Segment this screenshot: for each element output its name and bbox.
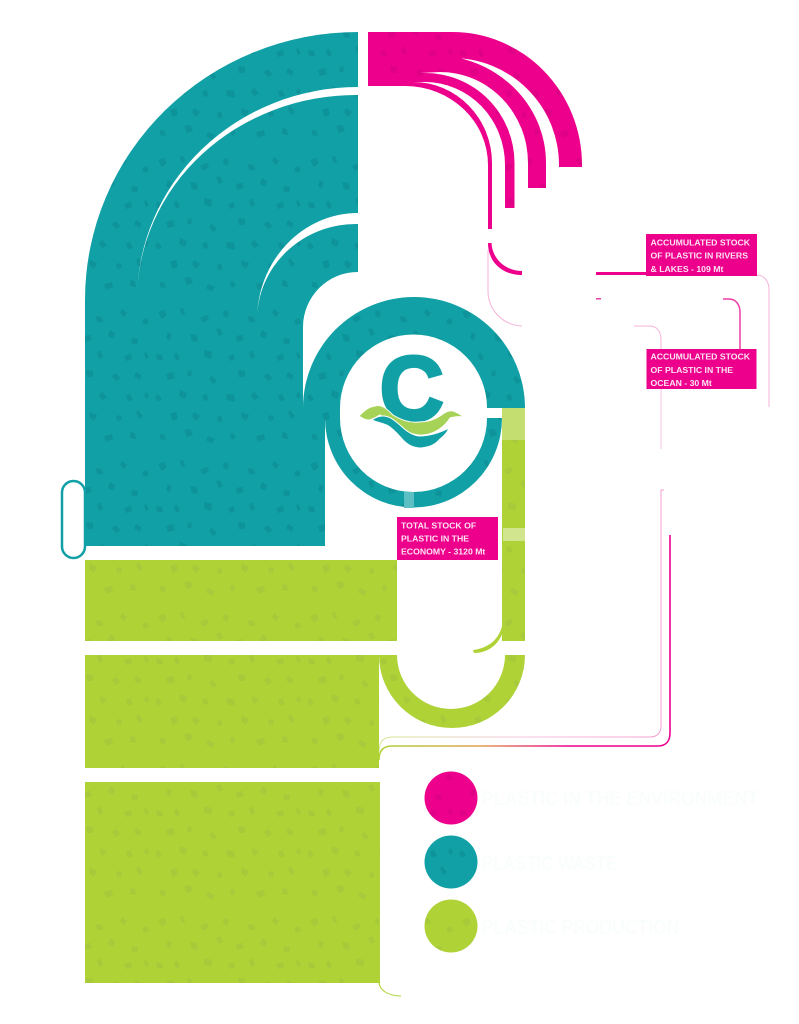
callout box: [397, 517, 498, 560]
callout: rivers and lakes stock: [646, 234, 757, 276]
pink connector to ocean box: [723, 299, 740, 349]
green vertical bar: [502, 408, 525, 641]
callout: ocean stock: [646, 349, 756, 389]
ring lower half: [325, 418, 502, 508]
pink connector to rivers box: [596, 272, 647, 275]
panel: plastic waste teal flow: [85, 32, 358, 546]
thin pink line below ocean box: [660, 389, 662, 449]
bold gradient lower connector: [379, 535, 670, 760]
thin green line lower left: [379, 983, 401, 996]
green block middle: [85, 655, 379, 768]
white gap between inner teal bands: [257, 213, 358, 320]
callout text: ACCUMULATED STOCK: [650, 238, 751, 248]
thin pink outer line right: [757, 275, 769, 407]
legend dot: waste: [424, 836, 478, 888]
pink flow line to rivers and lakes: [488, 243, 522, 275]
icon: C logo with waves: [359, 338, 464, 448]
teal rounded pill outline: [62, 481, 85, 558]
thin pink line to lower connector: [634, 326, 661, 420]
legend label: waste: PLASTIC WASTE: [482, 853, 617, 875]
logo letter C: C: [380, 338, 444, 440]
legend label: environment: PLASTIC IN THE ENVIRONMENT: [482, 788, 758, 810]
callout text: & LAKES - 109 Mt: [650, 264, 723, 274]
panel: central teal ring: [303, 297, 525, 508]
thin green vertical edge: [378, 782, 380, 985]
legend dot: environment: [424, 772, 478, 824]
green bar highlight lower: [503, 528, 525, 541]
callout: economy stock: [397, 517, 498, 560]
green bar highlight upper: [502, 408, 525, 440]
panel: plastic in the environment pink flow: [368, 32, 582, 229]
callout text: OF PLASTIC IN THE: [650, 365, 733, 375]
callout text: PLASTIC IN THE: [401, 534, 469, 544]
callout box: [646, 234, 757, 276]
white gap between outer teal bands: [137, 87, 358, 300]
green thin crescent: [473, 622, 505, 653]
green block bottom: [85, 782, 379, 983]
legend: [424, 772, 758, 952]
legend label: production: PLASTIC PRODUCTION: [482, 917, 679, 939]
thin pink and green lower connector: [379, 490, 664, 752]
callout text: ECONOMY - 3120 Mt: [401, 546, 485, 556]
green U curve: [379, 655, 525, 728]
legend dot: production: [424, 900, 478, 952]
callout text: OCEAN - 30 Mt: [650, 378, 712, 388]
teal main flow shape: [85, 32, 358, 546]
callout box: [646, 349, 756, 389]
ring light highlight: [404, 492, 414, 508]
ring upper half: [303, 297, 525, 420]
thin pink line left curve: [488, 250, 522, 326]
logo teal wave: [372, 416, 449, 448]
short pink tick: [596, 298, 601, 300]
logo green wave: [359, 405, 464, 435]
green block top: [85, 560, 397, 641]
callout text: TOTAL STOCK OF: [401, 520, 476, 530]
panel: plastic production green flow: [85, 408, 525, 996]
callout text: ACCUMULATED STOCK: [650, 352, 751, 362]
callout text: OF PLASTIC IN RIVERS: [650, 250, 748, 260]
